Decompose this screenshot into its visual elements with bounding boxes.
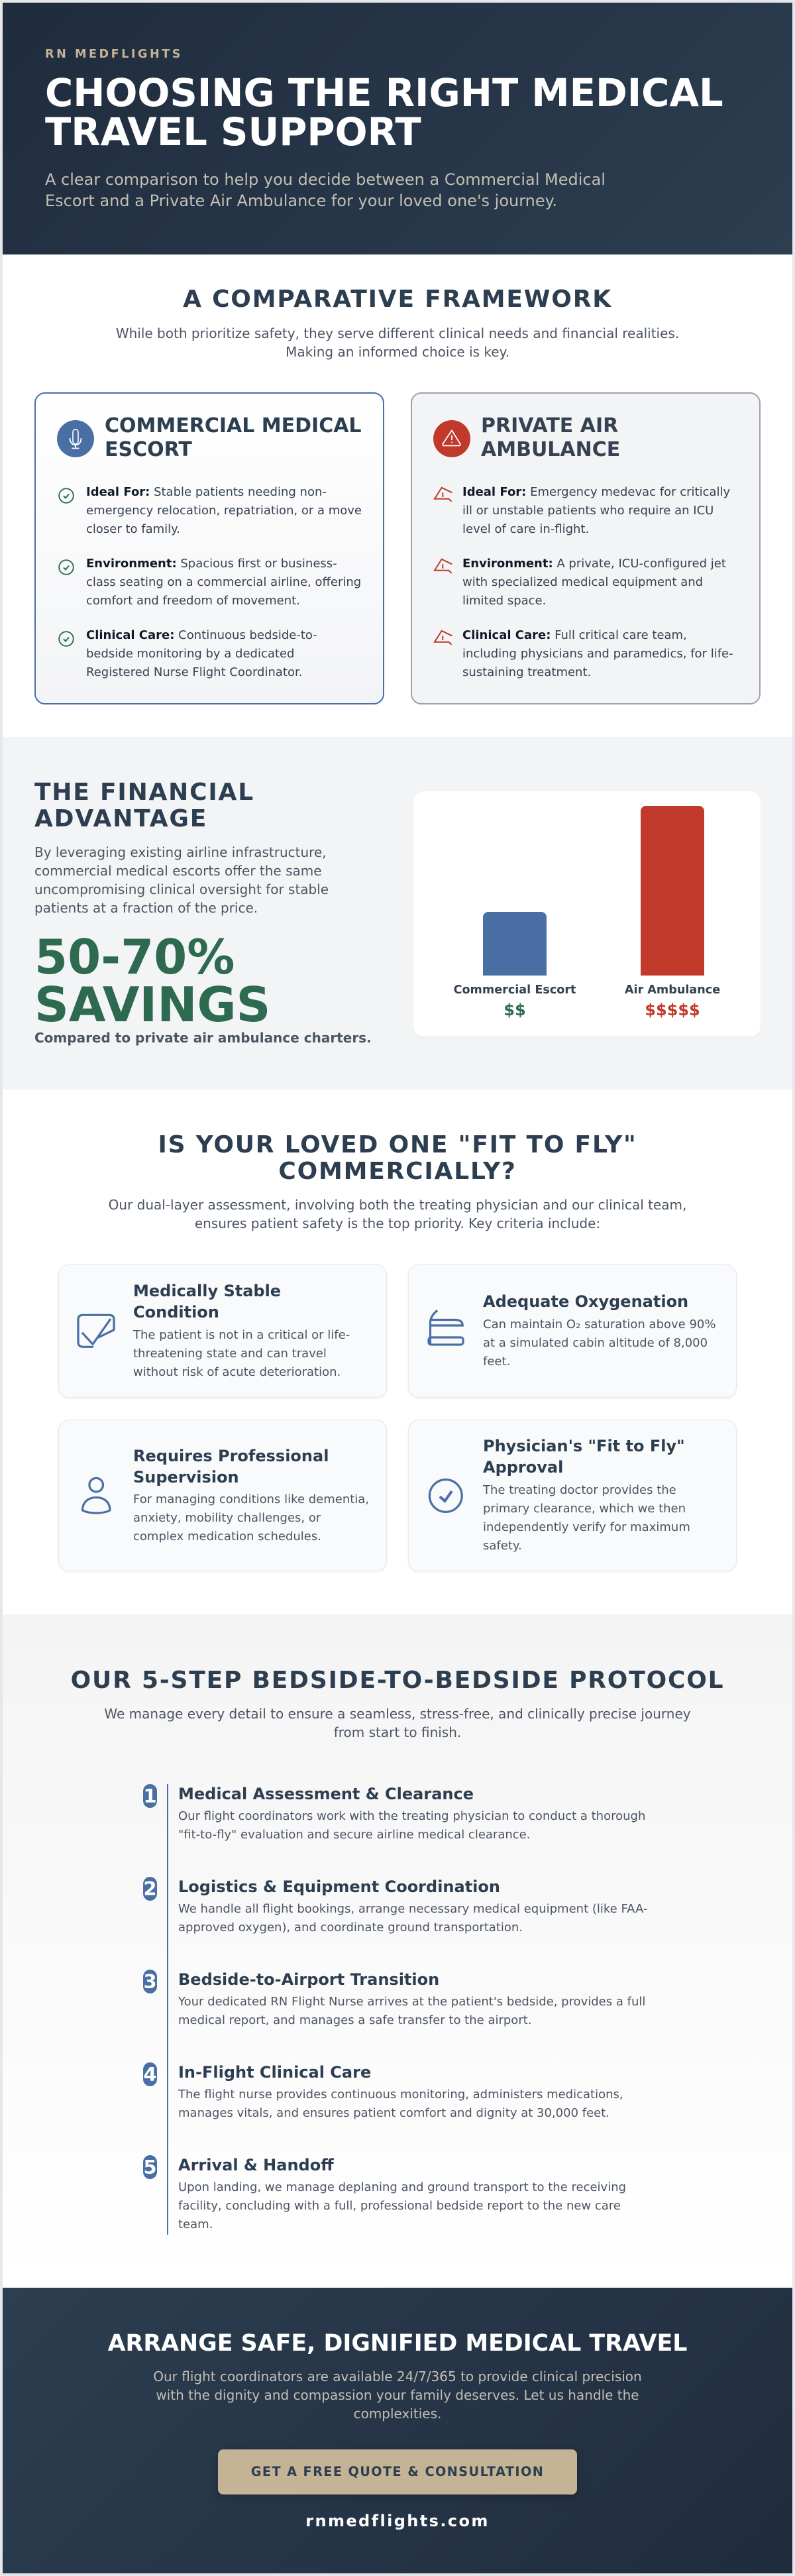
body text: By leveraging existing airline infrastructure, xyxy=(34,844,327,860)
step text xyxy=(178,1809,645,1842)
criterion title: Medically Stable xyxy=(133,1282,281,1300)
section heading xyxy=(158,1131,637,1185)
step text: Upon landing, we manage deplaning and ground transport to the receiving xyxy=(178,2180,626,2194)
criterion title: Supervision xyxy=(133,1468,239,1486)
bar: commercial escort xyxy=(483,912,547,976)
step title: In-Flight Clinical Care xyxy=(178,2063,371,2082)
cta text: with the dignity and compassion your family deserves. Let us handle the xyxy=(156,2387,639,2403)
step text: Your dedicated RN Flight Nurse arrives at the patient's bedside, provides a full xyxy=(178,1995,645,2009)
main title: CHOOSING THE RIGHT MEDICAL xyxy=(45,71,723,115)
card title xyxy=(481,414,620,461)
criterion card: adequate oxygenation xyxy=(408,1264,737,1398)
card title: PRIVATE AIR xyxy=(481,414,618,437)
subtitle: A clear comparison to help you decide between a Commercial Medical xyxy=(45,170,606,189)
criterion title xyxy=(483,1437,685,1477)
savings statistic xyxy=(34,929,270,1033)
icon: check circle xyxy=(428,1479,463,1513)
section intro: While both prioritize safety, they serve different clinical needs and financial realities. xyxy=(116,325,679,341)
criterion title xyxy=(133,1447,329,1486)
step text xyxy=(178,1993,645,2030)
cta text: Our flight coordinators are available 24/7/365 to provide clinical precision xyxy=(153,2369,642,2384)
criterion title: Condition xyxy=(133,1303,219,1321)
item: environment: Environment: A private, ICU-configured jet xyxy=(462,557,726,571)
step text xyxy=(178,2086,623,2123)
item: clinical care: bedside monitoring by a dedicated xyxy=(86,647,294,661)
icon: alert xyxy=(433,558,452,574)
item: clinical care: Clinical Care: Continuous bedside-to- xyxy=(86,628,317,642)
section heading: ADVANTAGE xyxy=(34,805,207,832)
step number: 4 xyxy=(143,2063,157,2086)
cost value: $$ xyxy=(504,1001,526,1019)
timeline line xyxy=(167,1784,168,2235)
criterion text: threatening state and can travel xyxy=(133,1347,327,1361)
body text: patients at a fraction of the price. xyxy=(34,900,258,916)
criterion text: independently verify for maximum xyxy=(483,1520,690,1534)
cta text xyxy=(3,2367,792,2423)
section intro: from start to finish. xyxy=(334,1724,461,1740)
criterion card: physician approval xyxy=(408,1420,737,1571)
section intro xyxy=(104,1706,691,1740)
panel: call to action xyxy=(3,2288,792,2573)
panel: private air ambulance xyxy=(411,392,761,704)
item: clinical care: Registered Nurse Flight Coordinator. xyxy=(86,665,302,679)
icon: person xyxy=(81,1477,111,1514)
panel: financial advantage xyxy=(3,737,792,1090)
step text xyxy=(178,1902,647,1934)
item: ideal for: emergency relocation, repatriation, or a move xyxy=(86,504,362,518)
criterion text xyxy=(133,1492,369,1543)
icon: alert xyxy=(433,486,452,502)
criterion title: Approval xyxy=(483,1458,563,1477)
subtitle: Escort and a Private Air Ambulance for your loved one's journey. xyxy=(45,192,557,210)
criterion text: The treating doctor provides the xyxy=(483,1483,676,1497)
section heading: A COMPARATIVE FRAMEWORK xyxy=(183,286,612,313)
step 3 xyxy=(143,1970,647,2036)
section intro: Our dual-layer assessment, involving both the treating physician and our clinical team, xyxy=(109,1197,686,1213)
body text xyxy=(34,844,329,916)
savings statistic: 50-70% xyxy=(34,929,235,985)
step number: 3 xyxy=(143,1970,157,1993)
criterion text: Can maintain O₂ saturation above 90% xyxy=(483,1317,716,1331)
cta text: complexities. xyxy=(354,2406,441,2422)
step 1 xyxy=(143,1784,645,1842)
icon: bed xyxy=(427,1310,464,1346)
icon: check xyxy=(58,488,74,504)
item: clinical care: Clinical Care: Full critical care team, xyxy=(462,628,687,642)
section intro: We manage every detail to ensure a seamless, stress-free, and clinically precise journey xyxy=(104,1706,691,1722)
step text: "fit-to-fly" evaluation and secure airline medical clearance. xyxy=(178,1828,530,1842)
criterion title xyxy=(133,1282,281,1321)
bar: air ambulance xyxy=(641,806,704,976)
step text xyxy=(178,2178,626,2234)
step number: 1 xyxy=(143,1785,157,1807)
item: clinical care xyxy=(462,628,733,679)
section intro: Making an informed choice is key. xyxy=(286,344,509,360)
body text: commercial medical escorts offer the same xyxy=(34,863,322,879)
item: ideal for: Ideal For: Stable patients needing non- xyxy=(86,485,327,499)
step 5 xyxy=(143,2155,647,2221)
icon: microphone badge xyxy=(57,420,94,457)
step number: 5 xyxy=(143,2156,157,2178)
website: rnmedflights.com xyxy=(305,2512,490,2530)
subtitle xyxy=(45,170,606,210)
item: ideal for: level of care in-flight. xyxy=(462,522,589,536)
icon: alert xyxy=(433,630,452,645)
criterion title: Physician's "Fit to Fly" xyxy=(483,1437,685,1455)
step title: Arrival & Handoff xyxy=(178,2156,334,2174)
item: environment xyxy=(86,557,361,608)
panel: 5-step protocol xyxy=(3,1614,792,2288)
savings statistic: SAVINGS xyxy=(34,977,270,1033)
criterion card: professional supervision xyxy=(58,1420,387,1571)
bar label: Commercial Escort xyxy=(454,983,576,997)
cta button xyxy=(218,2449,577,2494)
bar chart xyxy=(413,791,761,1036)
criterion title: Requires Professional xyxy=(133,1447,329,1465)
step title: Medical Assessment & Clearance xyxy=(178,1785,474,1803)
icon: check xyxy=(58,631,74,647)
criterion text: feet. xyxy=(483,1355,510,1369)
item: ideal for xyxy=(462,485,730,536)
step text: manages vitals, and ensures patient comfort and dignity at 30,000 feet. xyxy=(178,2106,610,2120)
main title: TRAVEL SUPPORT xyxy=(45,110,421,154)
card title xyxy=(105,414,362,461)
criterion text xyxy=(132,1328,350,1379)
step title: Logistics & Equipment Coordination xyxy=(178,1877,500,1896)
header banner xyxy=(3,3,792,254)
section heading: COMMERCIALLY? xyxy=(278,1158,517,1185)
step text: Our flight coordinators work with the treating physician to conduct a thorough xyxy=(178,1809,645,1823)
item: clinical care: including physicians and paramedics, for life- xyxy=(462,647,733,661)
item: environment: class seating on a commercial airline, offering xyxy=(86,575,361,589)
step title: Bedside-to-Airport Transition xyxy=(178,1970,439,1989)
main title xyxy=(45,71,723,154)
step text: medical report, and manages a safe transfer to the airport. xyxy=(178,2013,531,2027)
item: clinical care: sustaining treatment. xyxy=(462,665,591,679)
step text: The flight nurse provides continuous monitoring, administers medications, xyxy=(178,2088,623,2101)
criterion text: at a simulated cabin altitude of 8,000 xyxy=(483,1336,708,1350)
section heading: THE FINANCIAL xyxy=(34,779,254,806)
criterion text: anxiety, mobility challenges, or xyxy=(133,1511,321,1525)
criterion text xyxy=(482,1483,690,1553)
body text: uncompromising clinical oversight for stable xyxy=(34,881,329,897)
section heading: IS YOUR LOVED ONE "FIT TO FLY" xyxy=(158,1131,637,1158)
criterion text: complex medication schedules. xyxy=(133,1530,321,1543)
item: ideal for: ill or unstable patients who require an ICU xyxy=(462,504,714,518)
bar label: Air Ambulance xyxy=(625,983,720,997)
card title: AMBULANCE xyxy=(481,438,620,461)
icon: warning badge xyxy=(433,420,470,457)
criterion title: Adequate Oxygenation xyxy=(483,1292,688,1311)
section intro xyxy=(116,325,679,360)
savings caption: Compared to private air ambulance charters. xyxy=(34,1030,372,1046)
cost value: $$$$$ xyxy=(645,1001,700,1019)
criterion text xyxy=(483,1317,716,1369)
step 2 xyxy=(143,1877,647,1934)
item: environment: with specialized medical equipment and xyxy=(462,575,703,589)
criterion text: primary clearance, which we then xyxy=(483,1502,686,1516)
icon: checked box xyxy=(77,1314,115,1348)
section intro xyxy=(109,1197,686,1231)
item: ideal for: closer to family. xyxy=(86,522,180,536)
card title: COMMERCIAL MEDICAL xyxy=(105,414,362,437)
criterion text: For managing conditions like dementia, xyxy=(133,1492,369,1506)
panel: commercial medical escort xyxy=(34,392,384,704)
item: environment: Environment: Spacious first or business- xyxy=(86,557,337,571)
panel: comparative framework xyxy=(3,254,792,737)
card title: ESCORT xyxy=(105,438,192,461)
criterion card: medically stable xyxy=(58,1264,387,1398)
step number: 2 xyxy=(143,1877,157,1900)
item: clinical care xyxy=(86,628,317,679)
step 4 xyxy=(143,2062,647,2129)
cta heading: ARRANGE SAFE, DIGNIFIED MEDICAL TRAVEL xyxy=(108,2330,687,2357)
item: environment: comfort and freedom of movement. xyxy=(86,594,300,608)
brand eyebrow: RN MEDFLIGHTS xyxy=(45,48,183,61)
criterion text: safety. xyxy=(483,1539,522,1553)
panel: fit to fly xyxy=(3,1090,792,1614)
section heading xyxy=(34,779,254,832)
item: environment xyxy=(462,557,726,608)
criterion text: without risk of acute deterioration. xyxy=(133,1365,341,1379)
section intro: ensures patient safety is the top priority. Key criteria include: xyxy=(195,1215,600,1231)
criterion text: The patient is not in a critical or life- xyxy=(133,1328,350,1342)
step text: facility, concluding with a full, professional bedside report to the new care xyxy=(178,2199,621,2213)
icon: check xyxy=(58,559,74,575)
section heading: OUR 5-STEP BEDSIDE-TO-BEDSIDE PROTOCOL xyxy=(71,1667,724,1694)
item: ideal for xyxy=(86,485,362,536)
item: ideal for: Ideal For: Emergency medevac for critically xyxy=(462,485,730,499)
step text: team. xyxy=(178,2217,213,2231)
item: environment: limited space. xyxy=(462,594,546,608)
cta button: GET A FREE QUOTE & CONSULTATION xyxy=(251,2464,544,2479)
step text: approved oxygen), and coordinate ground transportation. xyxy=(178,1921,523,1934)
step text: We handle all flight bookings, arrange necessary medical equipment (like FAA- xyxy=(178,1902,647,1916)
